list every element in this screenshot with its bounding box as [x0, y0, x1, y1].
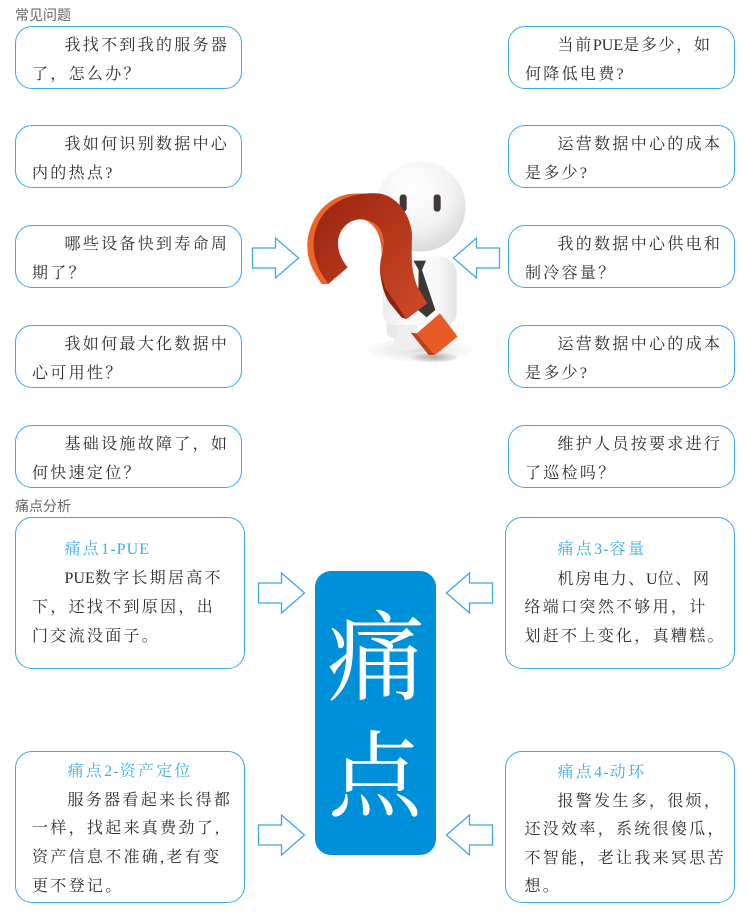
panel: pain point 3: [505, 517, 735, 669]
arrow: pain 3: [446, 573, 492, 613]
panel: pain point 1: PUE数字长期居高不: [64, 570, 223, 587]
question box 1: 我找不到我的服务器: [64, 37, 229, 54]
question box 6: 何降低电费?: [525, 66, 626, 83]
question box 1: 了，怎么办？: [32, 66, 142, 83]
question box 10: 维护人员按要求进行: [558, 436, 722, 453]
panel: central pain point block: 痛: [327, 606, 425, 714]
question box 3: 期了？: [32, 265, 87, 282]
arrow: pain 1: [258, 573, 304, 613]
question box 4: [15, 325, 242, 388]
question box 4: 心可用性？: [32, 365, 124, 382]
question box 8: 制冷容量？: [525, 265, 617, 282]
question box 2: 内的热点?: [32, 165, 115, 182]
panel: pain point 1: 痛点1-PUE: [64, 541, 150, 558]
question box 10: [508, 425, 735, 488]
panel: pain point 4: 痛点4-动环: [558, 764, 646, 781]
panel: pain point 3: 机房电力、U位、网: [558, 571, 711, 588]
question box 7: 是多少?: [525, 165, 589, 182]
question box 5: 何快速定位？: [32, 465, 142, 482]
panel: pain point 4: [505, 751, 735, 903]
question box 2: 我如何识别数据中心: [64, 136, 229, 153]
panel: pain point 2: 服务器看起来长得都: [68, 792, 232, 809]
question box 3: [15, 225, 242, 288]
panel: pain point 2: [15, 751, 245, 903]
arrow: top right: [454, 238, 500, 278]
question box 6: [508, 26, 735, 89]
question box 10: 了巡检吗？: [525, 465, 617, 482]
panel: central pain point block: [315, 571, 436, 855]
heading: FAQ: 常见问题: [15, 7, 71, 23]
panel: pain point 2: 痛点2-资产定位: [68, 763, 193, 780]
panel: pain point 2: 一样，找起来真费劲了,: [32, 820, 221, 837]
arrow: pain 4: [446, 815, 492, 855]
panel: pain point 3: 络端口突然不够用，计: [524, 599, 708, 616]
arrow: top left: [252, 238, 298, 278]
question box 5: 基础设施故障了，如: [64, 436, 229, 453]
question box 9: [508, 325, 735, 388]
panel: pain point 1: [15, 517, 245, 669]
panel: pain point 4: 想。: [524, 878, 561, 895]
question box 7: [508, 125, 735, 188]
panel: central pain point block: 点: [328, 726, 422, 830]
question box 8: [508, 225, 735, 288]
panel: pain point 4: 不智能，老让我来冥思苦: [524, 850, 726, 867]
question box 7: 运营数据中心的成本: [558, 136, 722, 153]
panel: pain point 2: 更不登记。: [32, 878, 124, 895]
question box 9: 是多少?: [525, 365, 589, 382]
panel: pain point 3: 痛点3-容量: [558, 541, 646, 558]
panel: pain point 4: 还没效率，系统很傻瓜，: [524, 821, 726, 838]
question box 2: [15, 125, 242, 188]
question box 3: 哪些设备快到寿命周: [64, 236, 229, 253]
heading: pain point analysis: 痛点分析: [15, 498, 71, 514]
panel: pain point 1: 门交流没面子。: [32, 628, 160, 645]
panel: pain point 1: 下，还找不到原因，出: [32, 599, 215, 616]
question box 9: 运营数据中心的成本: [558, 336, 722, 353]
question box 1: [15, 26, 242, 89]
question box 8: 我的数据中心供电和: [558, 236, 722, 253]
question box 4: 我如何最大化数据中: [64, 336, 229, 353]
panel: pain point 4: 报警发生多，很烦，: [558, 793, 722, 810]
illustration: figure with question mark: [307, 162, 477, 363]
question box 5: [15, 425, 242, 488]
question box 6: 当前PUE是多少，如: [558, 37, 712, 54]
panel: pain point 2: 资产信息不准确,老有变: [32, 849, 221, 866]
panel: pain point 3: 划赶不上变化，真糟糕。: [524, 628, 726, 645]
arrow: pain 2: [258, 815, 304, 855]
